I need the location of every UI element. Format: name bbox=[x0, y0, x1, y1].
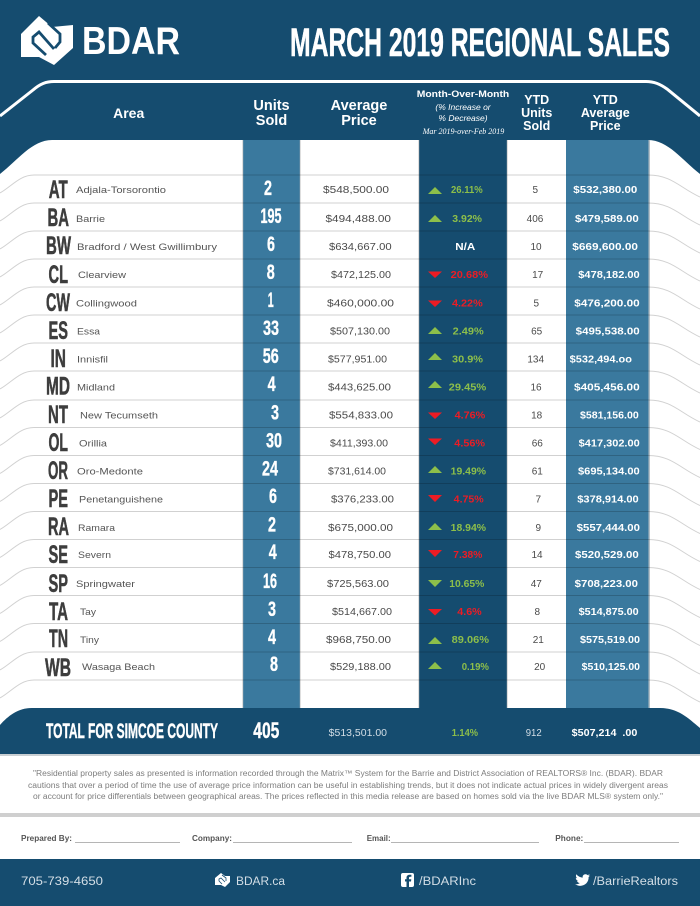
disclaimer: "Residential property sales as presented is information recorded through the Matrix™ System for the Barrie and District Association of REALTORS® Inc. (BDAR). BDAR bbox=[33, 769, 663, 778]
change: 7.38% bbox=[453, 550, 482, 561]
heading: month over month: (% Increase or bbox=[435, 102, 492, 112]
heading: month over month: Month-Over-Month bbox=[417, 89, 509, 100]
units: 8 bbox=[270, 653, 278, 676]
price: $472,125.00 bbox=[331, 270, 391, 281]
change bbox=[428, 438, 485, 450]
units: 33 bbox=[263, 317, 279, 340]
code: RA bbox=[48, 513, 69, 541]
units: 4 bbox=[269, 541, 277, 564]
disclaimer bbox=[28, 769, 668, 801]
column: month over month bbox=[418, 140, 508, 708]
change: 30.9% bbox=[452, 354, 483, 366]
code: CW bbox=[46, 289, 70, 317]
area: New Tecumseth bbox=[80, 410, 158, 422]
change bbox=[428, 381, 486, 394]
change: 4.56% bbox=[454, 438, 485, 450]
ytd units: 134 bbox=[527, 354, 544, 366]
units: 3 bbox=[271, 402, 279, 424]
change: 4.6% bbox=[457, 607, 482, 618]
area: Midland bbox=[77, 382, 115, 394]
row: OR bbox=[48, 457, 640, 485]
header background bbox=[0, 0, 700, 174]
code: BW bbox=[46, 232, 71, 260]
icon: facebook bbox=[401, 873, 414, 887]
code: SE bbox=[48, 541, 68, 569]
row: BW bbox=[46, 232, 639, 260]
header outline curve bbox=[0, 82, 700, 116]
price: $548,500.00 bbox=[323, 185, 390, 196]
heading: month over month bbox=[417, 89, 509, 136]
prepared by field: Prepared By: bbox=[21, 834, 72, 843]
ytd price: $708,223.00 bbox=[575, 579, 638, 590]
change: 18.94% bbox=[451, 523, 486, 534]
ytd price: $532,494.oo bbox=[570, 354, 632, 366]
change: 2.49% bbox=[453, 326, 484, 338]
row: IN bbox=[50, 345, 632, 373]
code: TN bbox=[49, 625, 68, 653]
phone field: Phone: bbox=[555, 834, 583, 843]
change bbox=[428, 607, 482, 618]
area: Oro-Medonte bbox=[77, 466, 143, 478]
price: $968,750.00 bbox=[326, 635, 391, 646]
units: 56 bbox=[263, 345, 279, 368]
sign-off form bbox=[21, 834, 679, 843]
company field: Company: bbox=[192, 834, 232, 843]
column: units sold bbox=[242, 140, 300, 708]
ytd units: 14 bbox=[531, 550, 543, 561]
units: 3 bbox=[268, 598, 276, 621]
code: WB bbox=[45, 654, 71, 682]
units: 2 bbox=[268, 514, 276, 536]
row: CW bbox=[46, 289, 640, 317]
price: $507,130.00 bbox=[330, 326, 390, 338]
change bbox=[428, 326, 484, 338]
row: TA bbox=[49, 598, 639, 626]
ytd price: $417,302.00 bbox=[579, 438, 640, 450]
units: 4 bbox=[268, 373, 276, 396]
ytd price: $514,875.00 bbox=[579, 607, 639, 618]
units: 195 bbox=[260, 205, 282, 228]
area: Severn bbox=[78, 550, 111, 561]
row: AT bbox=[49, 176, 638, 204]
ytd units: 17 bbox=[532, 270, 544, 281]
ytd units: 66 bbox=[532, 438, 543, 450]
total ytd units: 912 bbox=[526, 728, 542, 739]
price: $529,188.00 bbox=[330, 662, 391, 673]
change: 89.06% bbox=[452, 635, 489, 646]
row: OL bbox=[48, 429, 640, 457]
change bbox=[428, 523, 486, 534]
area: Essa bbox=[77, 326, 101, 338]
price: $411,393.00 bbox=[330, 438, 388, 450]
price: $478,750.00 bbox=[328, 550, 391, 561]
ytd units: 10 bbox=[530, 242, 542, 253]
facebook handle: /BDARInc bbox=[419, 876, 476, 888]
area: Orillia bbox=[79, 438, 108, 450]
change bbox=[428, 635, 489, 646]
code: TA bbox=[49, 598, 68, 626]
ytd price: $510,125.00 bbox=[582, 662, 640, 673]
price: $514,667.00 bbox=[332, 607, 392, 618]
price: $376,233.00 bbox=[331, 494, 394, 506]
total average price: $513,501.00 bbox=[329, 728, 387, 739]
code: IN bbox=[50, 345, 66, 373]
brand name: BDAR bbox=[82, 20, 180, 63]
change bbox=[428, 579, 484, 590]
row: ES bbox=[48, 317, 640, 345]
row: NT bbox=[48, 401, 639, 429]
ytd units: 20 bbox=[534, 662, 546, 673]
units: 4 bbox=[268, 626, 276, 649]
change bbox=[428, 214, 482, 225]
price: $577,951.00 bbox=[328, 354, 387, 366]
change bbox=[428, 662, 489, 673]
ytd units: 65 bbox=[531, 326, 543, 338]
ytd units: 61 bbox=[532, 466, 543, 478]
ytd price: $557,444.00 bbox=[577, 523, 640, 534]
row: RA bbox=[48, 513, 640, 541]
area: Penetanguishene bbox=[79, 494, 163, 506]
icon: twitter bbox=[575, 874, 590, 886]
row: BA bbox=[48, 204, 639, 232]
icon: bdar logo bbox=[215, 873, 230, 887]
ytd price: $495,538.00 bbox=[576, 326, 640, 338]
units: 2 bbox=[264, 177, 272, 200]
units: 1 bbox=[268, 289, 274, 312]
ytd price: $478,182.00 bbox=[578, 270, 640, 281]
ytd units: 47 bbox=[531, 579, 542, 590]
row: SP bbox=[48, 570, 638, 598]
ytd price: $581,156.00 bbox=[580, 410, 639, 422]
twitter handle: /BarrieRealtors bbox=[593, 876, 678, 888]
area: Wasaga Beach bbox=[82, 662, 155, 673]
area: Clearview bbox=[78, 270, 126, 281]
heading: month over month: % Decrease) bbox=[438, 113, 488, 123]
ytd price: $520,529.00 bbox=[575, 550, 639, 561]
heading: ytd average price: YTD bbox=[593, 93, 618, 107]
heading: ytd average price: Average bbox=[581, 106, 630, 120]
column: ytd average price bbox=[566, 140, 650, 708]
change: 19.49% bbox=[451, 466, 486, 478]
heading: ytd units sold: Units bbox=[521, 106, 552, 120]
ytd price: $405,456.00 bbox=[574, 382, 640, 394]
code: AT bbox=[49, 176, 68, 204]
area: Innisfil bbox=[77, 354, 108, 366]
ytd units: 7 bbox=[536, 494, 542, 506]
code: SP bbox=[48, 570, 68, 598]
heading: units sold: Sold bbox=[256, 113, 287, 129]
disclaimer: or account for price differentials between geographical areas. The prices reflected in this media release are based on homes sold via the live BDAR MLS® system only." bbox=[33, 792, 663, 801]
code: PE bbox=[48, 485, 68, 513]
ytd units: 16 bbox=[530, 382, 542, 394]
units: 24 bbox=[262, 458, 278, 480]
disclaimer: cautions that over a period of time the use of average price information can be useful in establishing trends, but it does not indicate actual prices in widely divergent areas bbox=[28, 781, 668, 790]
change bbox=[428, 185, 483, 196]
code: ES bbox=[48, 317, 68, 345]
change: 4.22% bbox=[452, 298, 483, 310]
change bbox=[428, 410, 485, 422]
change: 0.19% bbox=[462, 662, 489, 673]
units: 16 bbox=[263, 570, 277, 593]
total ytd price: $507,214 .00 bbox=[572, 728, 638, 739]
change bbox=[428, 298, 483, 310]
change: 4.76% bbox=[455, 410, 485, 422]
ytd price: $669,600.00 bbox=[572, 242, 639, 253]
change bbox=[428, 270, 488, 281]
row: CL bbox=[48, 261, 640, 289]
ytd units: 18 bbox=[531, 410, 543, 422]
heading: units sold: Units bbox=[253, 98, 290, 114]
change: 20.68% bbox=[451, 270, 488, 281]
area: Tay bbox=[80, 607, 96, 618]
ytd units: 9 bbox=[536, 523, 542, 534]
price: $443,625.00 bbox=[328, 382, 391, 394]
area: Bradford / West Gwillimbury bbox=[77, 242, 217, 253]
total label: TOTAL FOR SIMCOE COUNTY bbox=[46, 720, 218, 743]
change: 10.65% bbox=[449, 579, 484, 590]
footer bbox=[0, 859, 700, 906]
code: OR bbox=[48, 457, 68, 485]
heading: ytd units sold: Sold bbox=[523, 119, 550, 133]
code: BA bbox=[48, 204, 69, 232]
change: 26.11% bbox=[451, 185, 483, 196]
ytd price: $378,914.00 bbox=[577, 494, 639, 506]
code: NT bbox=[48, 401, 68, 429]
area: Adjala-Torsorontio bbox=[76, 185, 166, 196]
units: 8 bbox=[267, 261, 275, 284]
area: Barrie bbox=[76, 214, 105, 225]
heading: ytd average price: Price bbox=[590, 119, 621, 133]
area: Collingwood bbox=[76, 298, 137, 310]
price: $460,000.00 bbox=[327, 298, 395, 310]
area: Springwater bbox=[76, 579, 135, 590]
change: 29.45% bbox=[449, 382, 486, 394]
website: BDAR.ca bbox=[236, 876, 286, 888]
price: $554,833.00 bbox=[329, 410, 393, 422]
units: 30 bbox=[266, 430, 282, 452]
change bbox=[428, 550, 482, 561]
ytd units: 5 bbox=[534, 298, 540, 310]
total band bbox=[0, 708, 700, 756]
row: SE bbox=[48, 541, 639, 569]
column headers bbox=[113, 89, 630, 136]
heading: average price: Price bbox=[341, 113, 377, 129]
ytd units: 406 bbox=[527, 214, 544, 225]
heading: month over month: Mar 2019-over-Feb 2019 bbox=[422, 127, 504, 136]
change: 4.75% bbox=[454, 494, 484, 506]
change bbox=[428, 494, 484, 506]
heading: average price: Average bbox=[331, 98, 387, 114]
row: WB bbox=[45, 653, 640, 682]
total units: 405 bbox=[253, 718, 279, 743]
area: Ramara bbox=[78, 523, 116, 534]
price: $731,614.00 bbox=[328, 466, 386, 478]
units: 6 bbox=[269, 485, 277, 508]
change: N/A bbox=[455, 242, 475, 253]
logo bbox=[21, 16, 73, 65]
heading: ytd units sold: YTD bbox=[524, 93, 549, 107]
phone number: 705-739-4650 bbox=[21, 876, 103, 888]
total change: 1.14% bbox=[452, 728, 478, 739]
ytd units: 5 bbox=[533, 185, 539, 196]
change bbox=[428, 353, 483, 366]
heading: area: Area bbox=[113, 105, 144, 121]
ytd price: $532,380.00 bbox=[573, 185, 638, 196]
change: 3.92% bbox=[452, 214, 482, 225]
units: 6 bbox=[267, 233, 275, 256]
change bbox=[428, 466, 486, 478]
row: MD bbox=[46, 372, 640, 400]
price: $675,000.00 bbox=[328, 523, 393, 534]
price: $494,488.00 bbox=[326, 214, 391, 225]
ytd units: 21 bbox=[533, 635, 544, 646]
ytd price: $479,589.00 bbox=[575, 214, 639, 225]
ytd units: 8 bbox=[535, 607, 541, 618]
ytd price: $695,134.00 bbox=[578, 466, 640, 478]
email field: Email: bbox=[367, 834, 391, 843]
ytd price: $476,200.00 bbox=[574, 298, 640, 310]
row: TN bbox=[49, 625, 640, 653]
row: PE bbox=[48, 485, 639, 513]
code: MD bbox=[46, 372, 70, 400]
area: Tiny bbox=[80, 635, 99, 646]
code: CL bbox=[48, 261, 68, 289]
code: OL bbox=[48, 429, 68, 457]
price: $634,667.00 bbox=[329, 242, 392, 253]
price: $725,563.00 bbox=[327, 579, 389, 590]
ytd price: $575,519.00 bbox=[580, 635, 640, 646]
phone field bbox=[555, 834, 679, 843]
